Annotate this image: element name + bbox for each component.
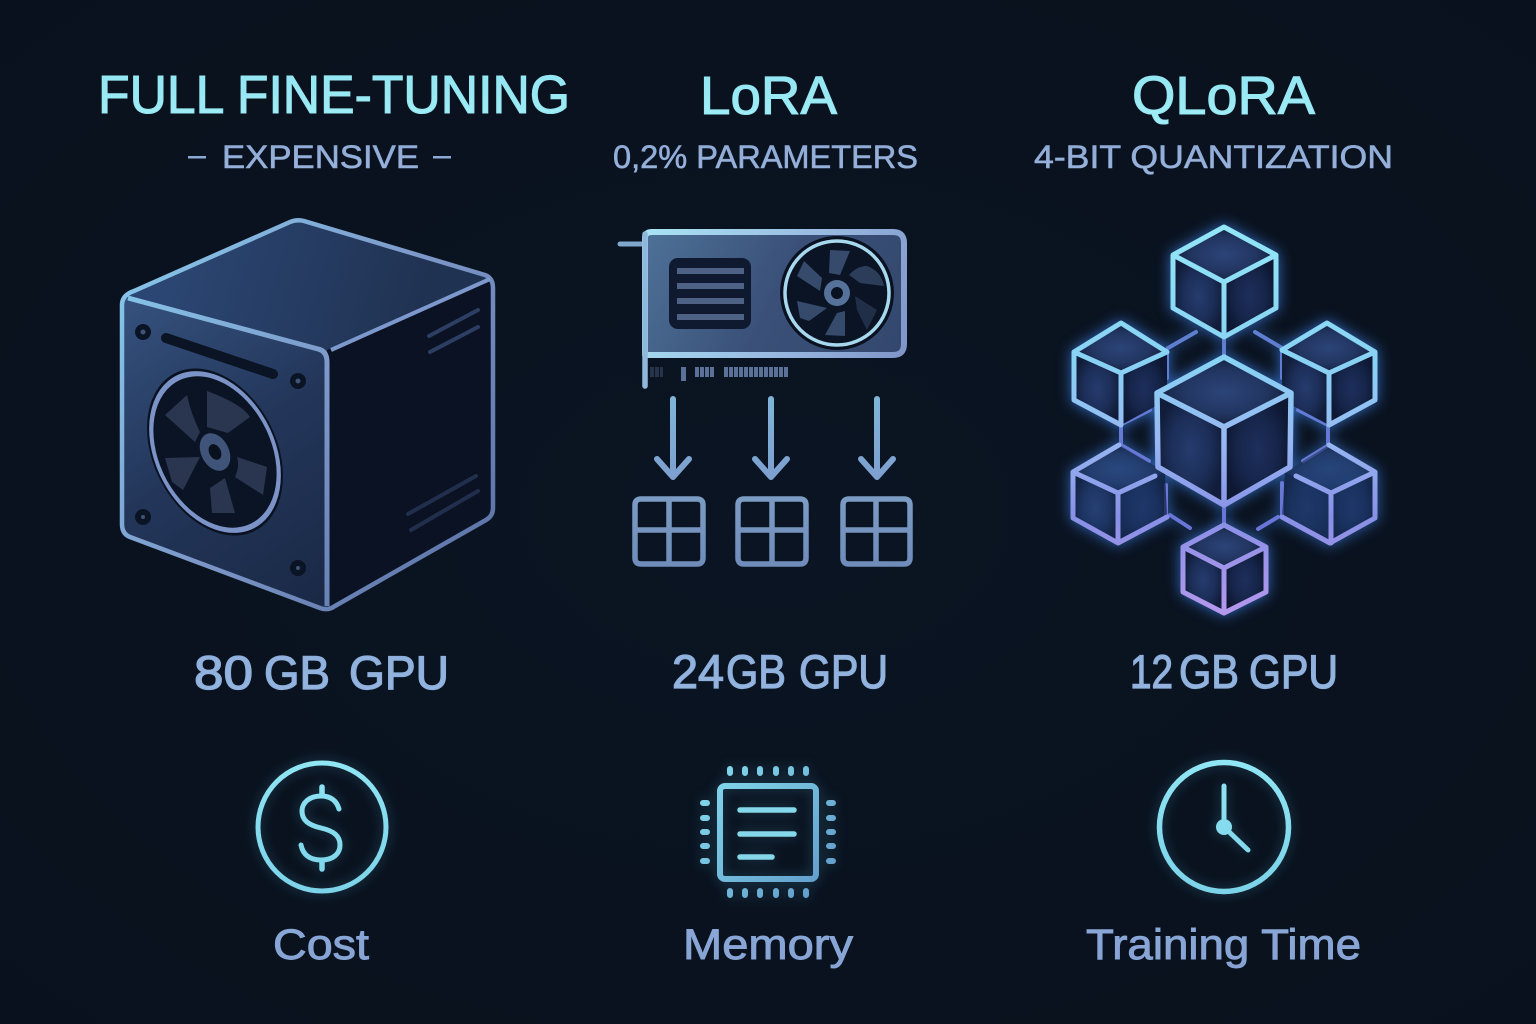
icon: dollar coin <box>258 763 386 891</box>
spec: 80GB GPU: GPU <box>349 646 449 699</box>
spec: 24GB GPU: GPU <box>799 645 888 698</box>
gpu fan <box>780 236 894 350</box>
grid: middle <box>738 499 806 564</box>
column: qlora <box>1034 66 1393 969</box>
subtitle: quantization: 4-BIT QUANTIZATION <box>1034 139 1393 175</box>
spec: 24GB GPU: 24 <box>672 645 724 698</box>
arrow: left <box>657 399 689 477</box>
cube: upper right <box>1282 323 1375 425</box>
subtitle: expensive: EXPENSIVE <box>222 139 419 175</box>
spec: 24GB GPU <box>672 645 888 698</box>
icon: graphics card <box>620 232 904 386</box>
icon: server box with fan <box>122 220 493 610</box>
column: lora <box>613 66 918 969</box>
spec: 12GB GPU: 12 <box>1130 645 1173 698</box>
spec: 12GB GPU: GPU <box>1249 645 1338 698</box>
spec: 80GB GPU: 80 <box>194 646 253 699</box>
cube: upper left <box>1074 323 1167 425</box>
cube: lower left <box>1073 445 1167 543</box>
pcie connector <box>650 367 789 377</box>
title: lora: LoRA <box>700 66 837 126</box>
spec: 12GB GPU <box>1130 645 1338 698</box>
arrow: middle <box>755 399 787 477</box>
cube: top <box>1173 227 1276 337</box>
title: qlora: QLoRA <box>1132 66 1315 126</box>
heat sink plate <box>669 258 751 329</box>
cube: bottom <box>1183 525 1266 613</box>
connector notch <box>681 367 686 381</box>
cube: center <box>1157 357 1291 505</box>
icon: clock <box>1160 762 1288 892</box>
grid: right <box>843 499 910 564</box>
icon: memory chip <box>703 769 833 895</box>
spec: 80GB GPU <box>194 646 449 699</box>
subtitle: parameters: 0,2% PARAMETERS <box>613 139 918 175</box>
grid: left <box>635 499 703 564</box>
cube: lower right <box>1282 445 1375 543</box>
column: full fine-tuning <box>98 65 570 969</box>
title: full fine-tuning: FULL FINE-TUNING <box>98 65 570 125</box>
connector links <box>1121 332 1329 540</box>
spec: 24GB GPU: GB <box>726 645 786 698</box>
icon: cube network <box>1073 227 1375 613</box>
label: training time: Training Time <box>1086 921 1361 969</box>
spec: 80GB GPU: GB <box>264 646 330 699</box>
label: cost: Cost <box>273 921 369 969</box>
arrow: right <box>861 399 893 477</box>
spec: 12GB GPU: GB <box>1179 645 1239 698</box>
label: memory: Memory <box>683 921 854 969</box>
